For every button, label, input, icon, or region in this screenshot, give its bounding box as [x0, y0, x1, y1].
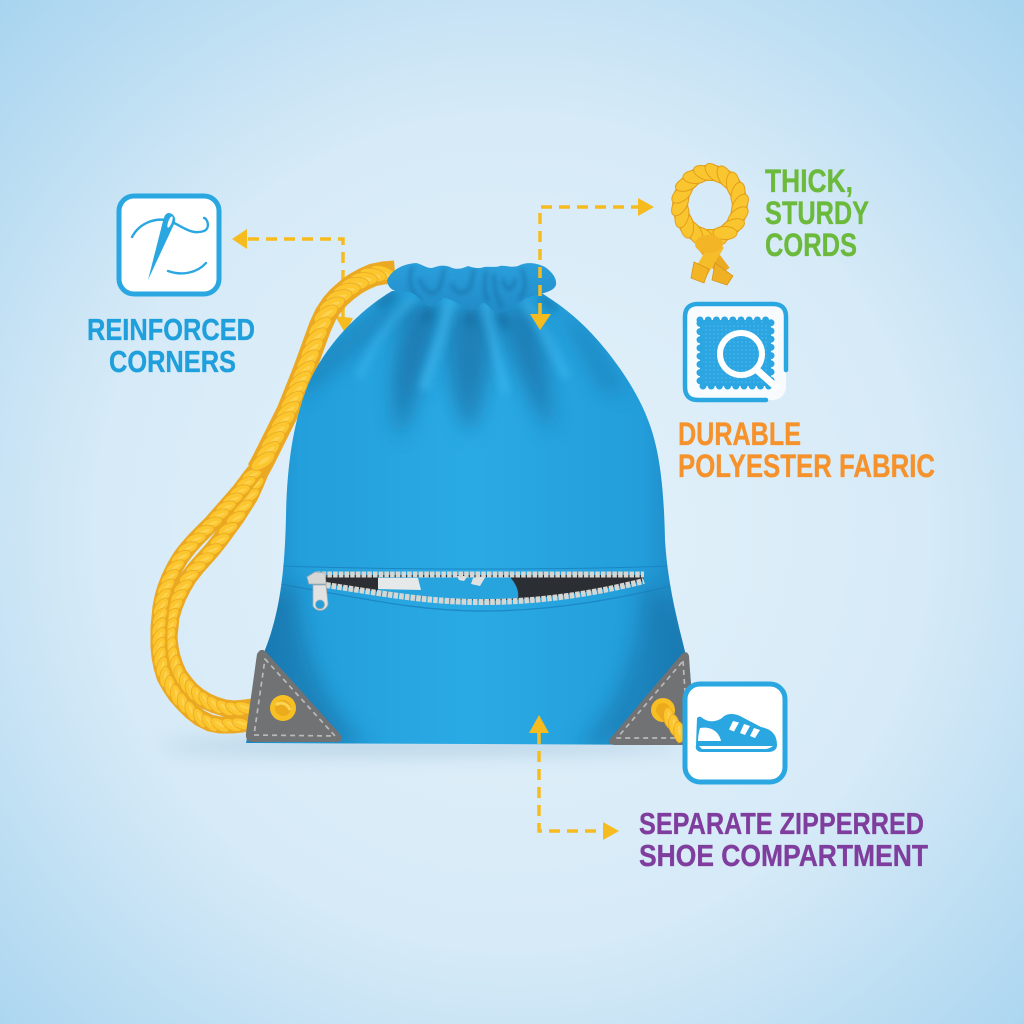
label: durable polyester fabric: [678, 416, 935, 484]
body shading and pleats: [247, 290, 692, 750]
rope ring: [680, 173, 740, 237]
zipper pull tab: [313, 585, 328, 610]
corner shading: [264, 580, 365, 744]
label: separate zippered shoe compartment: SEPARATE ZIPPERRED: [639, 806, 924, 841]
rope tails: [703, 244, 724, 272]
ground shadow: [160, 739, 690, 753]
label: thick sturdy cords: CORDS: [765, 227, 857, 263]
label: separate zippered shoe compartment: SHOE COMPARTMENT: [639, 838, 928, 873]
icon: fabric with magnifier: [685, 304, 786, 400]
drawstring rope: left side: [159, 272, 395, 725]
label: reinforced corners: REINFORCED: [87, 312, 255, 347]
pocket interior blue: [378, 577, 518, 600]
label: durable polyester fabric: POLYESTER FABRIC: [678, 448, 935, 484]
label: thick sturdy cords: THICK,: [765, 163, 853, 199]
white shoe inside: [378, 578, 421, 590]
pocket fold: [280, 584, 672, 611]
icon: needle and thread: [119, 196, 219, 294]
rope knot: [695, 235, 723, 253]
neck ruffle: [387, 263, 556, 313]
label: reinforced corners: CORNERS: [109, 344, 236, 379]
zipper slider: [307, 572, 326, 584]
label: reinforced corners: [87, 312, 255, 379]
label: thick sturdy cords: [765, 163, 869, 263]
zipper pocket: [307, 572, 644, 610]
inner strand: [169, 468, 262, 709]
corner patch: left: [246, 650, 342, 742]
zipper opening dark: [320, 575, 644, 601]
zipper teeth bottom: [326, 581, 644, 602]
outer strand: [159, 470, 256, 725]
icon: shoe: [685, 684, 785, 782]
label: durable polyester fabric: DURABLE: [678, 416, 801, 452]
crease accents under neck: [378, 293, 556, 328]
zipper teeth top: [316, 572, 644, 578]
arrow: shoe compartment: [529, 715, 619, 840]
icon: rope loop: [680, 173, 740, 285]
pocket seam: [280, 566, 672, 569]
arrow: bag top-left to reinforced corners, behind rope: [232, 229, 353, 333]
ruffle folds: [410, 268, 525, 306]
drawstring bag: [246, 258, 696, 750]
label: separate zippered shoe compartment: [639, 806, 928, 873]
light ridges: [360, 299, 412, 375]
bag body: [246, 291, 696, 745]
upper single rope: [258, 272, 395, 470]
arrow: bag neck to cords: [530, 198, 654, 330]
corner patch: right: [609, 652, 695, 745]
label: thick sturdy cords: STURDY: [765, 195, 869, 231]
